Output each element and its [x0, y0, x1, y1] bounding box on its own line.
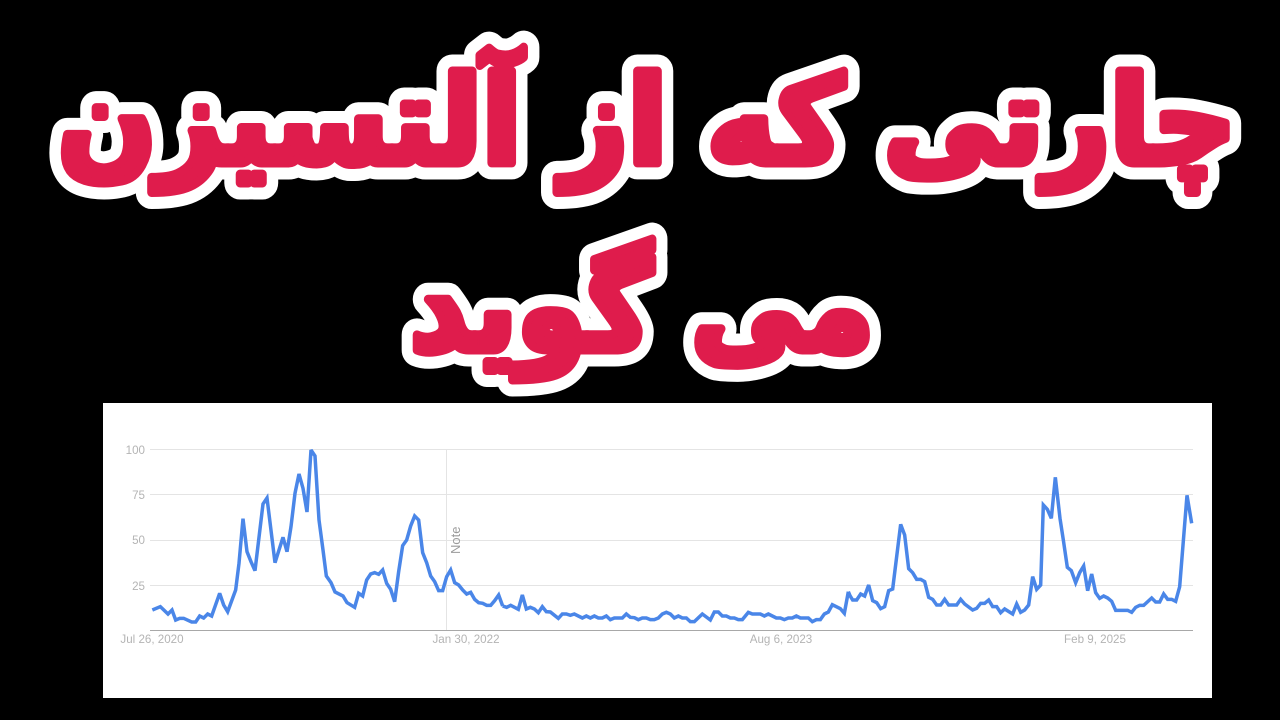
x axis labels: Aug 6, 2023: [750, 633, 812, 646]
title line 2: می گوید: [410, 237, 874, 380]
y axis labels: 75: [132, 489, 145, 502]
title line 1: چارتی که از آلتسیزن: [58, 47, 1236, 193]
grid lines: [150, 449, 1193, 630]
title line 2: می گوید: [410, 237, 874, 380]
y axis labels: 50: [132, 534, 145, 547]
panel: trend chart: [103, 403, 1212, 698]
x axis labels: Jul 26, 2020: [120, 633, 184, 646]
x axis labels: [120, 633, 1126, 646]
y axis labels: 100: [126, 444, 145, 457]
title line 1: چارتی که از آلتسیزن: [58, 47, 1236, 193]
line series: search interest: [152, 450, 1192, 622]
x axis line: [150, 630, 1193, 632]
x axis labels: Jan 30, 2022: [432, 633, 500, 646]
note marker: Note: [448, 527, 463, 554]
y axis labels: [126, 444, 145, 593]
y axis labels: 25: [132, 580, 145, 593]
x axis labels: Feb 9, 2025: [1064, 633, 1126, 646]
